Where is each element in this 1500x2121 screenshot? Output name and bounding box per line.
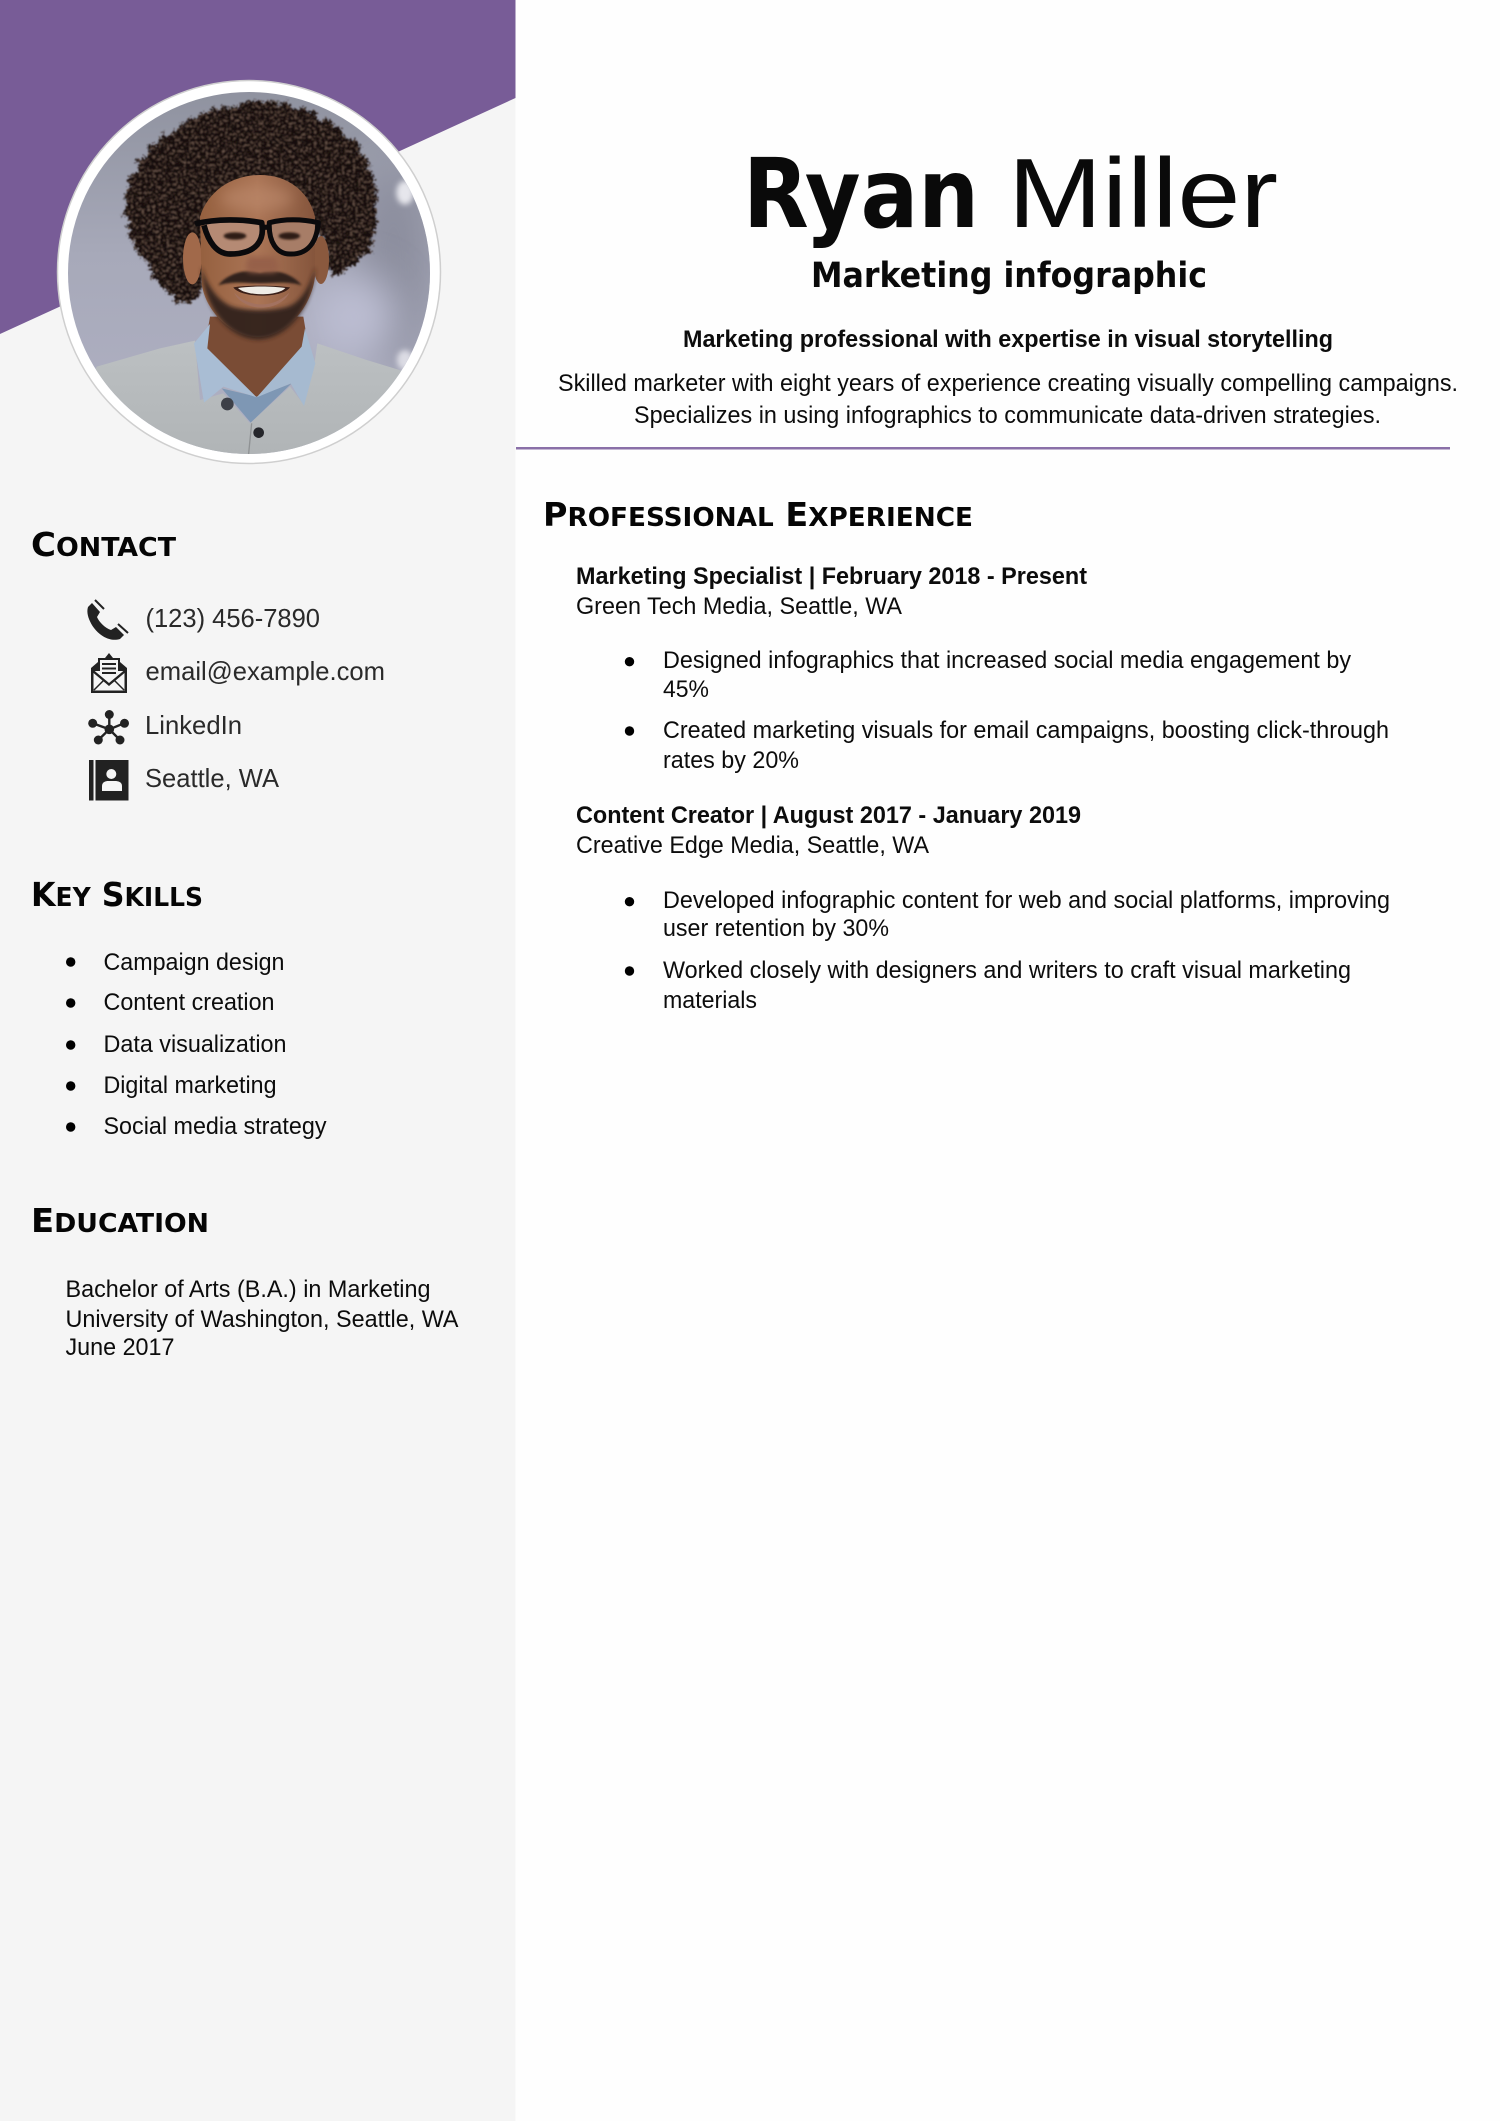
moustache: [218, 271, 302, 285]
title: name: [743, 138, 1278, 250]
contact list: [87, 600, 385, 800]
skills list: Data visualization: [104, 1031, 286, 1058]
lenses and eyes: [204, 222, 260, 252]
ears: [183, 232, 202, 284]
bullet list: Designed infographics that increased social media engagement by: [663, 647, 1351, 674]
lower lip: [234, 293, 289, 308]
buttons: [221, 398, 234, 410]
education details: June 2017: [66, 1334, 174, 1361]
job title: Content Creator | August 2017 - January 2019: [576, 802, 1081, 829]
job: marketing specialist: [576, 563, 1389, 774]
neck: [205, 317, 308, 398]
photo ring: [58, 80, 440, 464]
bullet list: Developed infographic content for web and social platforms, improving: [663, 887, 1390, 914]
bullet list: 45%: [663, 676, 709, 703]
sweater: [96, 340, 402, 454]
skills list: Digital marketing: [104, 1072, 276, 1099]
bullet list: rates by 20%: [663, 747, 799, 774]
title: name: Ryan: [743, 138, 979, 250]
icon: phone: [87, 600, 128, 640]
face: [200, 175, 315, 337]
bullet list: [625, 887, 1390, 1014]
bullet list: [625, 647, 1389, 774]
purple diagonal banner: [0, 0, 516, 334]
icon: email: [91, 653, 127, 693]
nose: [246, 257, 279, 273]
text: location: Seattle, WA: [145, 763, 280, 793]
summary: Skilled marketer with eight years of experience creating visually compelling campaigns.: [558, 370, 1458, 397]
skills list: Content creation: [104, 989, 274, 1016]
sidebar background: [0, 0, 516, 2121]
heading: contact: CONTACT: [31, 525, 176, 564]
portrait: [67, 90, 433, 457]
skills list: Campaign design: [104, 949, 284, 976]
education details: Bachelor of Arts (B.A.) in Marketing: [66, 1276, 430, 1303]
summary: Specializes in using infographics to communicate data-driven strategies.: [634, 402, 1381, 429]
icon: network: [88, 710, 129, 744]
teeth: [238, 286, 285, 294]
skills list: [66, 949, 326, 1140]
bullet list: user retention by 30%: [663, 915, 889, 942]
shirt collar: [194, 324, 257, 403]
bullet list: Created marketing visuals for email campaigns, boosting click-through: [663, 717, 1389, 744]
jaw beard: [201, 267, 315, 339]
education details: [66, 1276, 458, 1361]
job title: Marketing Specialist | February 2018 - Present: [576, 563, 1087, 590]
title: name: Miller: [1008, 138, 1278, 248]
heading: education: EDUCATION: [31, 1201, 209, 1240]
education details: University of Washington, Seattle, WA: [66, 1306, 458, 1333]
smile: [233, 286, 290, 296]
text: linkedin: LinkedIn: [145, 710, 242, 740]
icon: address book: [89, 760, 128, 800]
job: content creator: [576, 802, 1390, 1014]
company: Green Tech Media, Seattle, WA: [576, 593, 902, 620]
glasses: [195, 220, 318, 254]
company: Creative Edge Media, Seattle, WA: [576, 832, 929, 859]
summary: [558, 370, 1458, 429]
skills list: Social media strategy: [104, 1113, 326, 1140]
subtitle: Marketing infographic: [811, 256, 1207, 296]
tagline: Marketing professional with expertise in visual storytelling: [683, 326, 1333, 353]
bullet list: Worked closely with designers and writers to craft visual marketing: [663, 957, 1351, 984]
heading: professional experience: PROFESSIONAL EXPERIENCE: [543, 495, 973, 534]
shirt placket: [222, 383, 292, 423]
heading: key skills: KEY SKILLS: [31, 875, 203, 914]
bullet list: materials: [663, 987, 757, 1014]
profile photo: [58, 80, 440, 464]
text: email: email@example.com: [146, 656, 385, 686]
text: phone: (123) 456-7890: [146, 603, 320, 633]
hair: [125, 101, 378, 305]
